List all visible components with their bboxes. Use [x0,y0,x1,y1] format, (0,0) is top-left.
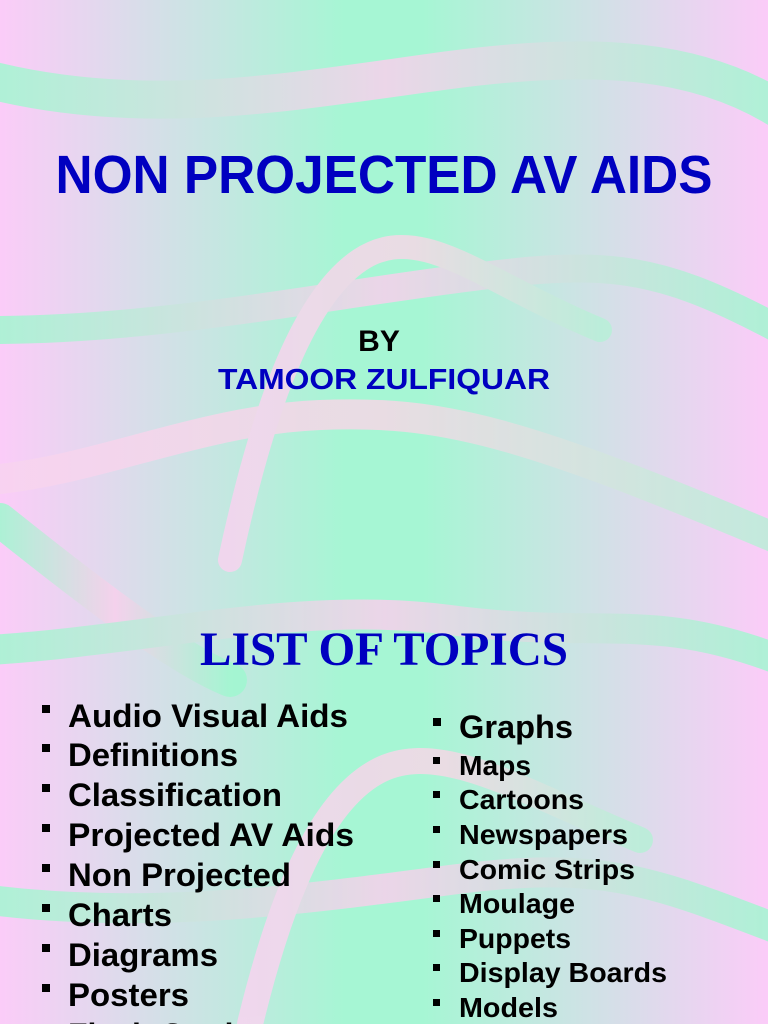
byline: BY [358,325,400,358]
left topic list: Posters [68,977,189,1013]
heading: list of topics: LIST OF TOPICS [200,623,568,676]
byline: TAMOOR ZULFIQUAR [218,364,550,396]
right topic list: Cartoons [459,784,584,815]
right topic list: Maps [459,750,531,781]
right topic list: Display Boards [459,957,667,988]
right topic list: Graphs [459,709,573,745]
left topic list: Classification [68,777,282,813]
right topic list [433,709,667,1023]
right topic list: Models [459,992,558,1023]
left topic list: Charts [68,897,172,933]
byline [218,325,550,396]
left topic list: Audio Visual Aids [68,698,348,734]
right topic list: Comic Strips [459,854,635,885]
left topic list [42,698,354,1024]
left topic list: Definitions [68,737,238,773]
left topic list: Diagrams [68,937,218,973]
left topic list: Projected AV Aids [68,817,354,853]
right topic list: Puppets [459,923,571,954]
right topic list: Newspapers [459,819,628,850]
right topic list: Moulage [459,888,575,919]
left topic list: Non Projected [68,857,291,893]
title: NON PROJECTED AV AIDS [56,145,712,205]
